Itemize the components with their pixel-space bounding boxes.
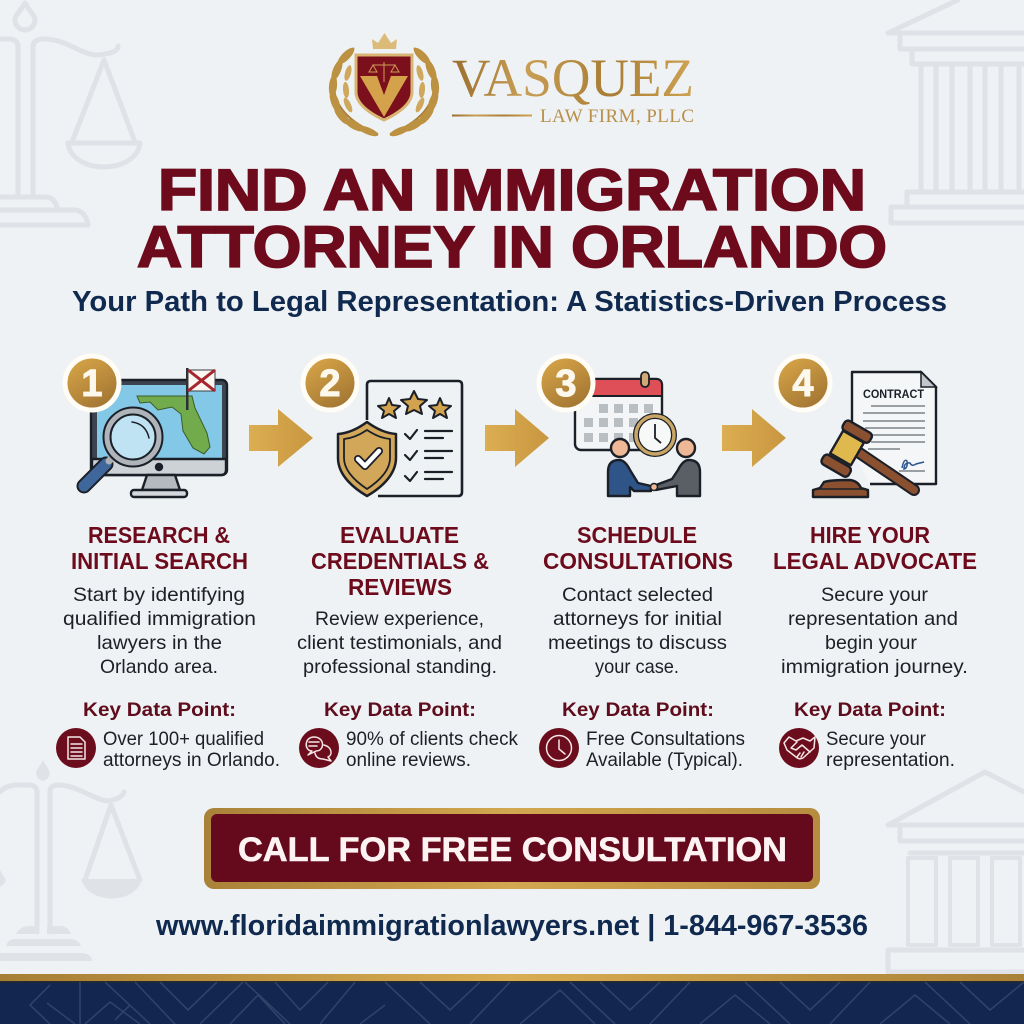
step 1 description [63, 584, 256, 678]
step 3 description [548, 584, 727, 678]
website and phone: www.floridaimmigrationlawyers.net | 1-844-967-3536 [155, 910, 868, 942]
logo wordmark: VASQUEZ [452, 48, 694, 108]
step 2 heading: REVIEWS [348, 574, 452, 600]
call to action button [204, 808, 820, 889]
step 4 key data label: Key Data Point: [794, 699, 946, 721]
step 4 description: immigration journey. [781, 656, 968, 678]
badge 3: 3 [555, 363, 577, 405]
step 2 data text: 90% of clients check [346, 729, 518, 750]
step 1 data text [103, 729, 280, 771]
logo scales mini icon [369, 62, 399, 82]
step 1 description: lawyers in the [97, 632, 222, 654]
step 3 heading: CONSULTATIONS [543, 548, 733, 574]
badge 4: 4 [792, 363, 814, 405]
call to action button: CALL FOR FREE CONSULTATION [238, 831, 787, 869]
step 3 key data label: Key Data Point: [562, 699, 714, 721]
arrow 2 [485, 409, 549, 467]
watermark: courthouse bottom right [888, 772, 1024, 972]
step 4 heading [773, 522, 977, 574]
rating stars [378, 391, 451, 418]
step 1 heading: INITIAL SEARCH [71, 548, 248, 574]
step 3 description: Contact selected [562, 584, 713, 606]
step 4 data text [826, 729, 955, 771]
icon: handshake [779, 728, 819, 768]
step 1 description: Orlando area. [100, 656, 218, 678]
step 1 heading [71, 522, 248, 574]
flag [186, 368, 215, 410]
step 2 text [297, 522, 518, 771]
step 1 data text: attorneys in Orlando. [103, 750, 280, 771]
step 2 heading: CREDENTIALS & [311, 548, 489, 574]
icon: document [56, 728, 96, 768]
handshake figures [608, 439, 700, 496]
step 1 key data label: Key Data Point: [83, 699, 236, 721]
step 4 description: Secure your [821, 584, 929, 606]
step 1 description: Start by identifying [73, 584, 245, 606]
logo subtitle: LAW FIRM, PLLC [540, 106, 694, 127]
logo crown [372, 33, 397, 49]
title: FIND AN IMMIGRATION [158, 158, 866, 223]
step 2 heading [311, 522, 489, 600]
clock [636, 416, 674, 454]
badge 1: 1 [81, 363, 103, 405]
step 3 description: your case. [595, 656, 679, 678]
title: ATTORNEY IN ORLANDO [137, 215, 887, 280]
step 1 description: qualified immigration [63, 608, 256, 630]
step 3 description: meetings to discuss [548, 632, 727, 654]
step 2 description: Review experience, [315, 608, 484, 630]
logo [327, 33, 441, 138]
badge 2: 2 [319, 363, 341, 405]
step 3 data text: Available (Typical). [586, 750, 743, 771]
watermark: scales top left [0, 3, 140, 225]
step 3 illustration [575, 372, 700, 496]
step 1 data text: Over 100+ qualified [103, 729, 264, 750]
florida map [137, 396, 210, 454]
watermark: courthouse top right [888, 0, 1024, 223]
badge 3 [539, 356, 593, 410]
step 1 illustration [84, 368, 227, 497]
step 3 heading [543, 522, 733, 574]
step 4 heading: LEGAL ADVOCATE [773, 548, 977, 574]
step 4 heading: HIRE YOUR [810, 522, 930, 548]
logo laurel left [327, 45, 380, 138]
logo V monogram [360, 76, 408, 117]
step 4 data text: Secure your [826, 729, 927, 750]
step 4 illustration [813, 372, 936, 497]
step 4 description [781, 584, 968, 678]
icon: chat bubbles [299, 728, 339, 768]
step 2 key data label: Key Data Point: [324, 699, 476, 721]
badge 2 [303, 356, 357, 410]
logo divider line [452, 114, 532, 116]
logo shield [356, 55, 412, 120]
shield with check [338, 422, 396, 496]
step 2 data text [346, 729, 518, 771]
step 3 heading: SCHEDULE [577, 522, 697, 548]
checklist document [367, 381, 462, 496]
step 2 heading: EVALUATE [340, 522, 459, 548]
step 2 description: client testimonials, and [297, 632, 502, 654]
icon: clock [539, 728, 579, 768]
contract document: CONTRACT [863, 389, 924, 401]
badge 4 [776, 356, 830, 410]
step 4 description: begin your [825, 632, 917, 654]
calendar [575, 372, 662, 450]
step 3 description: attorneys for initial [553, 608, 722, 630]
badge 1 [65, 356, 119, 410]
watermark: scales bottom left [0, 760, 142, 961]
title [137, 158, 887, 280]
arrow 3 [722, 409, 786, 467]
subtitle: Your Path to Legal Representation: A Statistics-Driven Process [72, 286, 947, 318]
monitor [91, 380, 227, 497]
step 2 description [297, 608, 502, 678]
step 2 illustration [338, 381, 462, 496]
gavel [813, 419, 914, 497]
magnifying glass [84, 411, 159, 486]
step 1 heading: RESEARCH & [88, 522, 230, 548]
step 2 data text: online reviews. [346, 750, 471, 771]
step 1 text [56, 522, 280, 771]
step 4 text [773, 522, 977, 771]
step 2 description: professional standing. [303, 656, 497, 678]
arrow 1 [249, 409, 313, 467]
step 3 data text [586, 729, 745, 771]
step 4 data text: representation. [826, 750, 955, 771]
logo laurel right [388, 45, 441, 138]
footer band [0, 974, 1024, 1024]
step 3 text [539, 522, 745, 771]
step 3 data text: Free Consultations [586, 729, 745, 750]
step 4 description: representation and [788, 608, 958, 630]
